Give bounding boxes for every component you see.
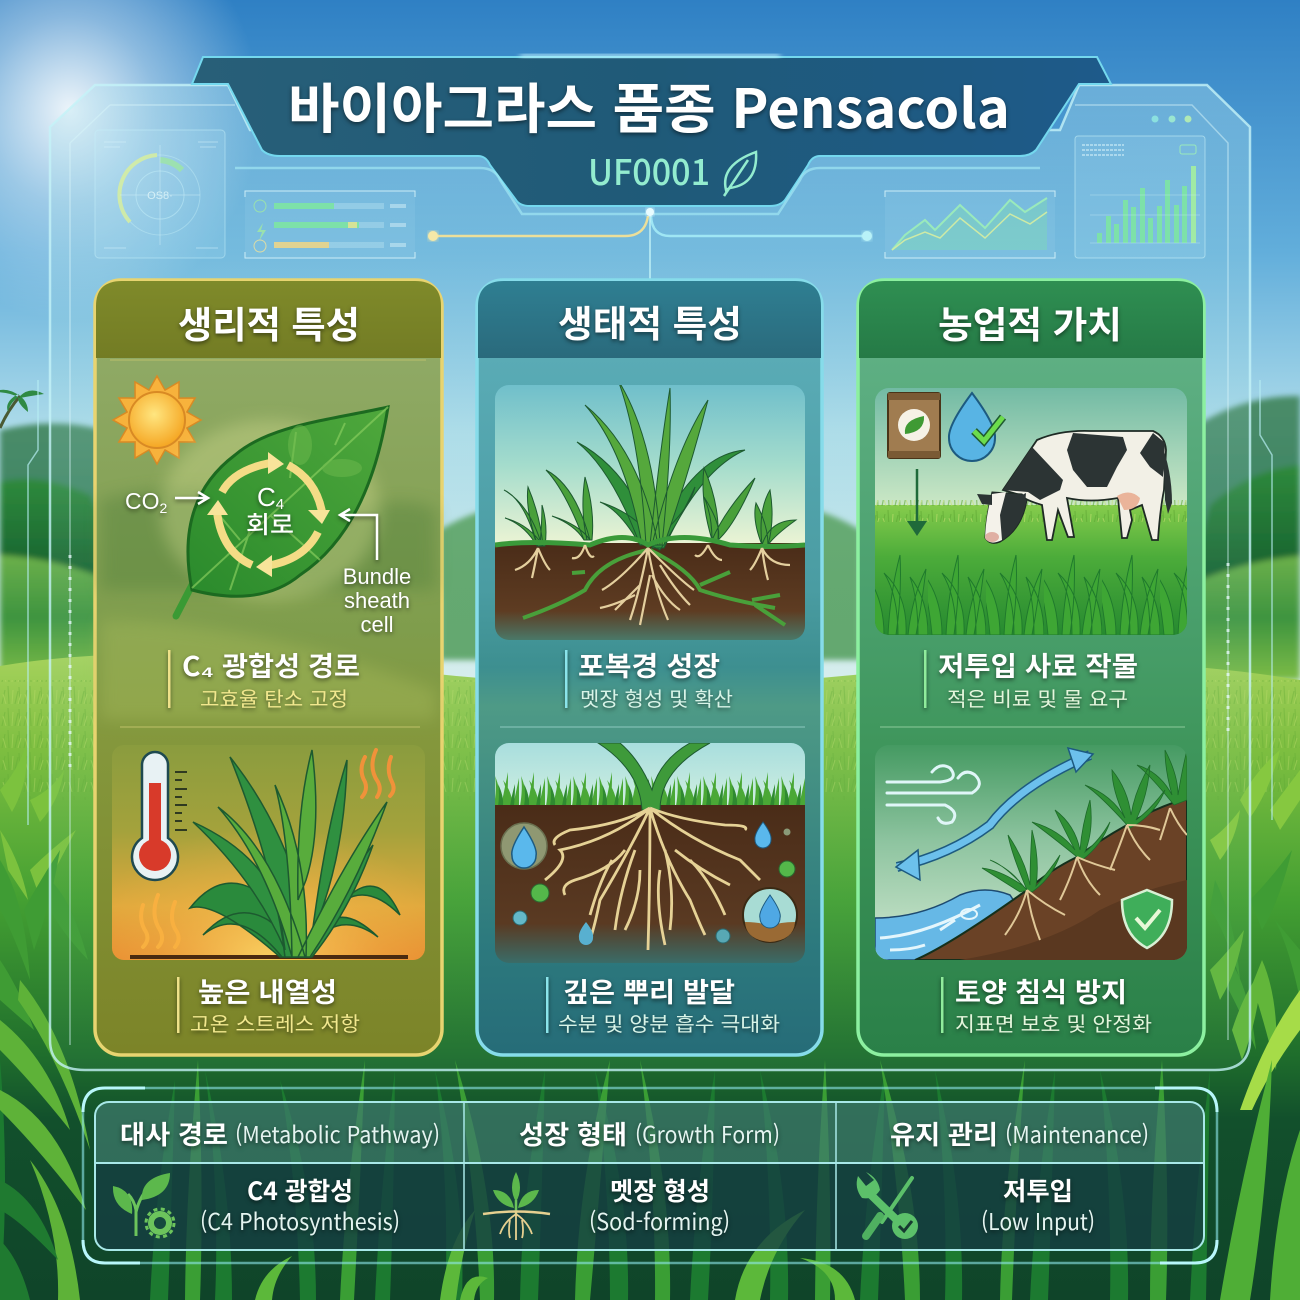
illustration: C4 leaf cycle	[125, 407, 411, 637]
table column 2: growth form	[519, 1115, 780, 1237]
illustration: C4 leaf cycle: cell	[360, 612, 394, 637]
illustration: erosion control	[875, 745, 1187, 960]
table column 3: maintenance: (Maintenance)	[1005, 1116, 1149, 1150]
heading: 생리적 특성	[178, 295, 360, 349]
table column 1: metabolic pathway: C4 광합성	[247, 1172, 353, 1208]
widget: line chart	[885, 191, 1055, 258]
label: low input forage: 적은 비료 및 물 요구	[947, 683, 1128, 712]
icon: shield	[1122, 890, 1172, 948]
label: C4 pathway: C₄ 광합성 경로	[182, 645, 360, 684]
label: heat tolerance	[177, 971, 360, 1037]
illustration: C4 leaf cycle: CO	[125, 488, 160, 514]
label: erosion control	[941, 971, 1152, 1037]
label: C4 pathway	[168, 645, 360, 712]
heading: 농업적 가치	[938, 295, 1122, 349]
table column 2: growth form: (Growth Form)	[635, 1116, 780, 1150]
label: heat tolerance: 높은 내열성	[198, 971, 337, 1010]
title: 바이아그라스 품종 Pensacola	[288, 65, 1010, 144]
left side blades	[0, 745, 90, 1300]
illustration: heat tolerance	[112, 745, 425, 960]
illustration: C4 leaf cycle: sheath	[344, 588, 410, 613]
label: stolon growth: 멧장 형성 및 확산	[580, 683, 733, 712]
table column 1: metabolic pathway: 대사 경로	[120, 1115, 228, 1152]
table column 3: maintenance: 저투입	[1003, 1172, 1073, 1208]
illustration: C4 leaf cycle: 회로	[246, 505, 294, 540]
label: stolon growth: 포복경 성장	[578, 645, 720, 684]
header banner	[192, 54, 1111, 214]
label: stolon growth	[565, 645, 733, 712]
summary table	[83, 1088, 1217, 1263]
connector lines	[428, 208, 872, 282]
illustration: C4 leaf cycle: Bundle	[343, 564, 411, 589]
subtitle code with leaf icon: UF0001	[588, 145, 710, 196]
cow	[977, 431, 1172, 543]
table column 2: growth form: (Sod-forming)	[589, 1203, 730, 1237]
label: erosion control: 지표면 보호 및 안정화	[955, 1008, 1152, 1037]
right side blades	[1210, 750, 1300, 1300]
illustration: stolon growth	[495, 380, 805, 640]
panel: 생태적 특성	[477, 280, 822, 1055]
label: low input forage: 저투입 사료 작물	[938, 645, 1138, 684]
label: C4 pathway: 고효율 탄소 고정	[200, 683, 348, 712]
table column 3: maintenance: (Low Input)	[981, 1203, 1095, 1237]
panel: 생리적 특성	[95, 280, 442, 1055]
icon: sun	[113, 376, 201, 464]
widget: progress bars	[245, 191, 415, 258]
panel: 농업적 가치	[858, 280, 1204, 1055]
label: deep roots	[546, 971, 780, 1037]
icon: leaves and gear	[113, 1173, 174, 1237]
label: deep roots: 수분 및 양분 흡수 극대화	[558, 1008, 780, 1037]
table column 2: growth form: 멧장 형성	[610, 1172, 710, 1208]
illustration: cow grazing on low-input forage	[875, 388, 1187, 635]
widget: circular gauge: OS8·	[147, 190, 173, 202]
illustration: C4 leaf cycle: 4	[276, 496, 284, 513]
widget: bar chart	[1075, 116, 1205, 258]
table column 1: metabolic pathway	[120, 1115, 440, 1237]
table column 2: growth form: 성장 형태	[519, 1115, 627, 1152]
icon: sprout with roots	[483, 1172, 550, 1240]
icon: wrench, screwdriver and check	[857, 1172, 918, 1239]
table column 1: metabolic pathway: (C4 Photosynthesis)	[200, 1203, 400, 1237]
icon: water drop with check	[949, 393, 1003, 461]
illustration: deep roots	[495, 743, 805, 963]
table column 3: maintenance	[890, 1115, 1149, 1237]
illustration: C4 leaf cycle: 2	[160, 500, 168, 516]
foreground grass blades	[0, 745, 1300, 1300]
illustration: C4 leaf cycle: C	[257, 482, 276, 512]
frame: translucent outer interface panel	[28, 85, 1272, 1070]
table column 3: maintenance: 유지 관리	[890, 1115, 998, 1152]
label: low input forage	[924, 645, 1138, 712]
label: heat tolerance: 고온 스트레스 저항	[190, 1008, 360, 1037]
heading: 생태적 특성	[558, 294, 742, 348]
table column 1: metabolic pathway: (Metabolic Pathway)	[235, 1116, 440, 1150]
widget: circular gauge	[95, 130, 225, 258]
icon: fertilizer bag	[888, 393, 940, 536]
label: deep roots: 깊은 뿌리 발달	[563, 971, 735, 1010]
label: erosion control: 토양 침식 방지	[955, 971, 1127, 1010]
